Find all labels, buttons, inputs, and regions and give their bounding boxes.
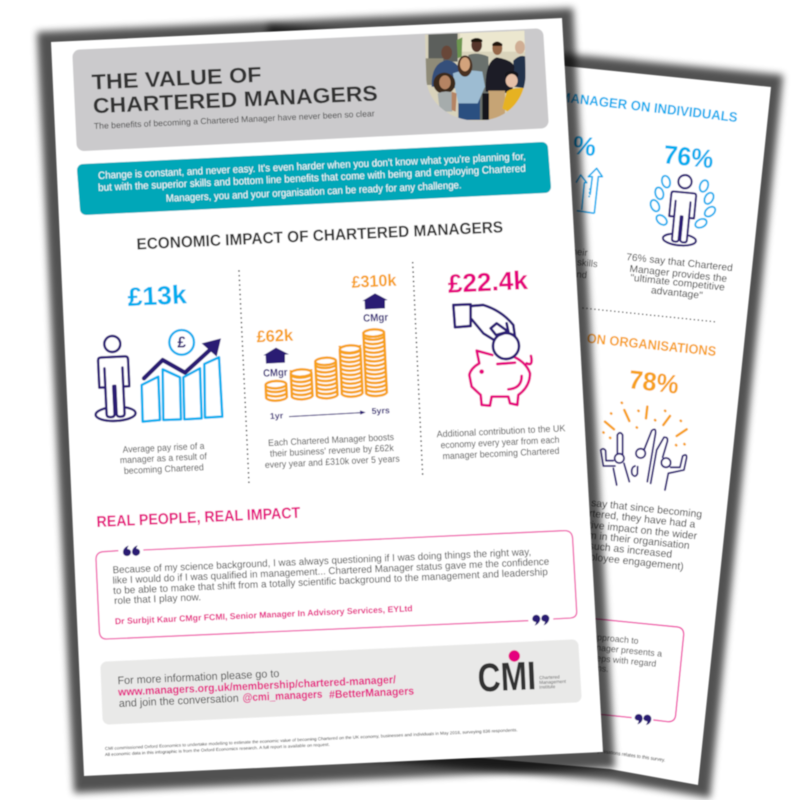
- caption: UK economy: [436, 423, 566, 461]
- back quote box: terms.: [584, 662, 609, 674]
- panel: more information: For more information please go to: [117, 668, 280, 687]
- caption: 78%: Chartered, they have had a: [569, 507, 696, 531]
- statistic £22.4k: £22.4k: [447, 265, 529, 299]
- caption: 78%: (such as increased: [585, 541, 673, 561]
- back quote box: Manager presents a: [584, 641, 663, 659]
- labels CMgr and timeline: 1yr: [270, 410, 284, 421]
- photo: group of managers: [423, 28, 528, 123]
- icon: hand and piggy bank: [453, 304, 532, 406]
- labels CMgr and timeline: CMgr: [363, 312, 388, 325]
- statistic £310k: £310k: [351, 272, 398, 292]
- back quote box: approach to: [592, 632, 639, 646]
- caption: 76%: Manager provides the: [629, 264, 728, 285]
- panel: teal introduction: Change is constant, and never easy. It's even harder when you don't know what you're planning for,: [98, 152, 526, 182]
- logo: CMI: Institute: [539, 684, 556, 690]
- panel: more information: #BetterManagers: [329, 685, 414, 701]
- caption: business revenue: every year and £310k over 5 years: [265, 454, 400, 470]
- front page shadow: [37, 8, 615, 793]
- caption: pay rise: manager as a result of: [120, 451, 207, 465]
- statistic £13k: £13k: [127, 279, 188, 312]
- icon: rising arrows: [576, 168, 602, 213]
- caption: UK economy: manager becoming Chartered: [442, 446, 560, 461]
- coin stacks and houses: [263, 293, 388, 417]
- panel: teal introduction: but with the superior skills and bottom line benefits that come with being and employing Chartered: [98, 164, 526, 194]
- quote text: like I would do if I was qualified in management... Chartered Manager status gave me the confidence: [112, 557, 550, 587]
- caption: 78%: team in their organisation: [573, 529, 690, 552]
- panel: UK economy: [436, 265, 566, 461]
- logo: CMI: CMI: [477, 654, 537, 701]
- caption: 78%: 78% say that since becoming: [567, 496, 703, 521]
- heading: real people, real impact: REAL PEOPLE, REAL IMPACT: [96, 505, 301, 531]
- heading: impact on individuals: MANAGER ON INDIVIDUALS: [559, 90, 738, 125]
- caption: 78%: employee engagement): [574, 551, 684, 573]
- title: [91, 63, 378, 118]
- back page shadow: [190, 25, 783, 798]
- logo: CMI: Management: [539, 679, 567, 685]
- partial caption left: [569, 246, 598, 281]
- panel: business revenue: [256, 272, 400, 470]
- caption: business revenue: [265, 432, 400, 470]
- panel: more information: and join the conversation: [119, 693, 239, 710]
- labels CMgr and timeline: [263, 312, 390, 421]
- caption: pay rise: becoming Chartered: [124, 462, 204, 476]
- panel: more information: www.managers.org.uk/membership/chartered-manager/: [117, 674, 396, 699]
- panel: more information: [107, 646, 575, 718]
- icon: person: [92, 335, 136, 422]
- labels CMgr and timeline: CMgr: [263, 367, 288, 380]
- panel: teal introduction: Managers, you and your organisation can be ready for any challenge.: [166, 180, 462, 205]
- caption: 76%: [626, 252, 733, 302]
- panel: quote: [96, 531, 577, 639]
- caption: 76%: advantage": [650, 285, 704, 302]
- heading: impact on organisations: ON ORGANISATIONS: [586, 331, 717, 359]
- quote text: [112, 547, 550, 607]
- quote text: to be able to make that shift from a totally scientific background to the management and leadership: [113, 567, 548, 597]
- back page: [197, 36, 771, 785]
- caption: business revenue: their business' revenue by £62k: [270, 443, 394, 459]
- panel: more information: @cmi_managers: [242, 689, 323, 704]
- quote attribution: Dr Surbjit Kaur CMgr FCMI, Senior Manager In Advisory Services, EYLtd: [115, 603, 413, 626]
- statistic £62k: £62k: [256, 327, 294, 346]
- caption: 78%: [567, 496, 703, 573]
- partial caption left: skills: [577, 257, 598, 270]
- icon: person with laurel leaves: [649, 173, 717, 247]
- labels CMgr and timeline: 5yrs: [371, 405, 390, 416]
- statistic 76%: 76%: [662, 139, 715, 174]
- title: CHARTERED MANAGERS: [92, 81, 378, 118]
- caption: UK economy: economy every year from each: [440, 435, 560, 450]
- logo: CMI: Chartered: [539, 674, 560, 680]
- panel: pay rise: [92, 279, 222, 476]
- panel: title banner: [80, 28, 541, 144]
- caption: pay rise: [120, 441, 207, 476]
- heading: economic impact: ECONOMIC IMPACT OF CHARTERED MANAGERS: [136, 219, 504, 253]
- icon: rising bar chart: [142, 330, 222, 422]
- caption: 76%: "ultimate competitive: [630, 273, 726, 294]
- icon: celebrating people: [601, 403, 687, 490]
- caption: pay rise: Average pay rise of a: [122, 441, 205, 455]
- title: THE VALUE OF: [91, 63, 262, 94]
- back footnote: organisations relates to this survey.: [592, 748, 666, 764]
- back quote box: [580, 617, 684, 725]
- caption: 76%: 76% say that Chartered: [626, 252, 733, 274]
- subtitle: The benefits of becoming a Chartered Manager have never been so clear: [94, 108, 375, 131]
- caption: UK economy: Additional contribution to the UK: [436, 423, 566, 439]
- icon: rising bar chart: £: [177, 335, 186, 352]
- caption: 78%: positive impact on the wider: [569, 518, 698, 542]
- caption: business revenue: Each Chartered Manager boosts: [268, 432, 395, 448]
- front page: [51, 18, 603, 776]
- partial caption left: and: [571, 269, 588, 281]
- statistic 78%: 78%: [627, 364, 680, 400]
- partial caption left: their: [569, 246, 588, 259]
- footnote: All economic data in this infographic is from the Oxford Economics research. A full report is available on request.: [105, 742, 330, 757]
- back quote box: steps with regard: [589, 652, 657, 669]
- quote text: Because of my science background, I was always questioning if I was doing things the right way,: [112, 547, 531, 576]
- partial statistic percent: %: [571, 130, 598, 162]
- quote text: role that I play now.: [114, 592, 201, 607]
- footnote: CMI commissioned Oxford Economics to undertake modelling to estimate the economic value of becoming Chartered on the UK economy, businesses and individuals in May 2018, surveying 836 respondents.: [105, 727, 518, 751]
- panel: teal introduction: [83, 148, 545, 209]
